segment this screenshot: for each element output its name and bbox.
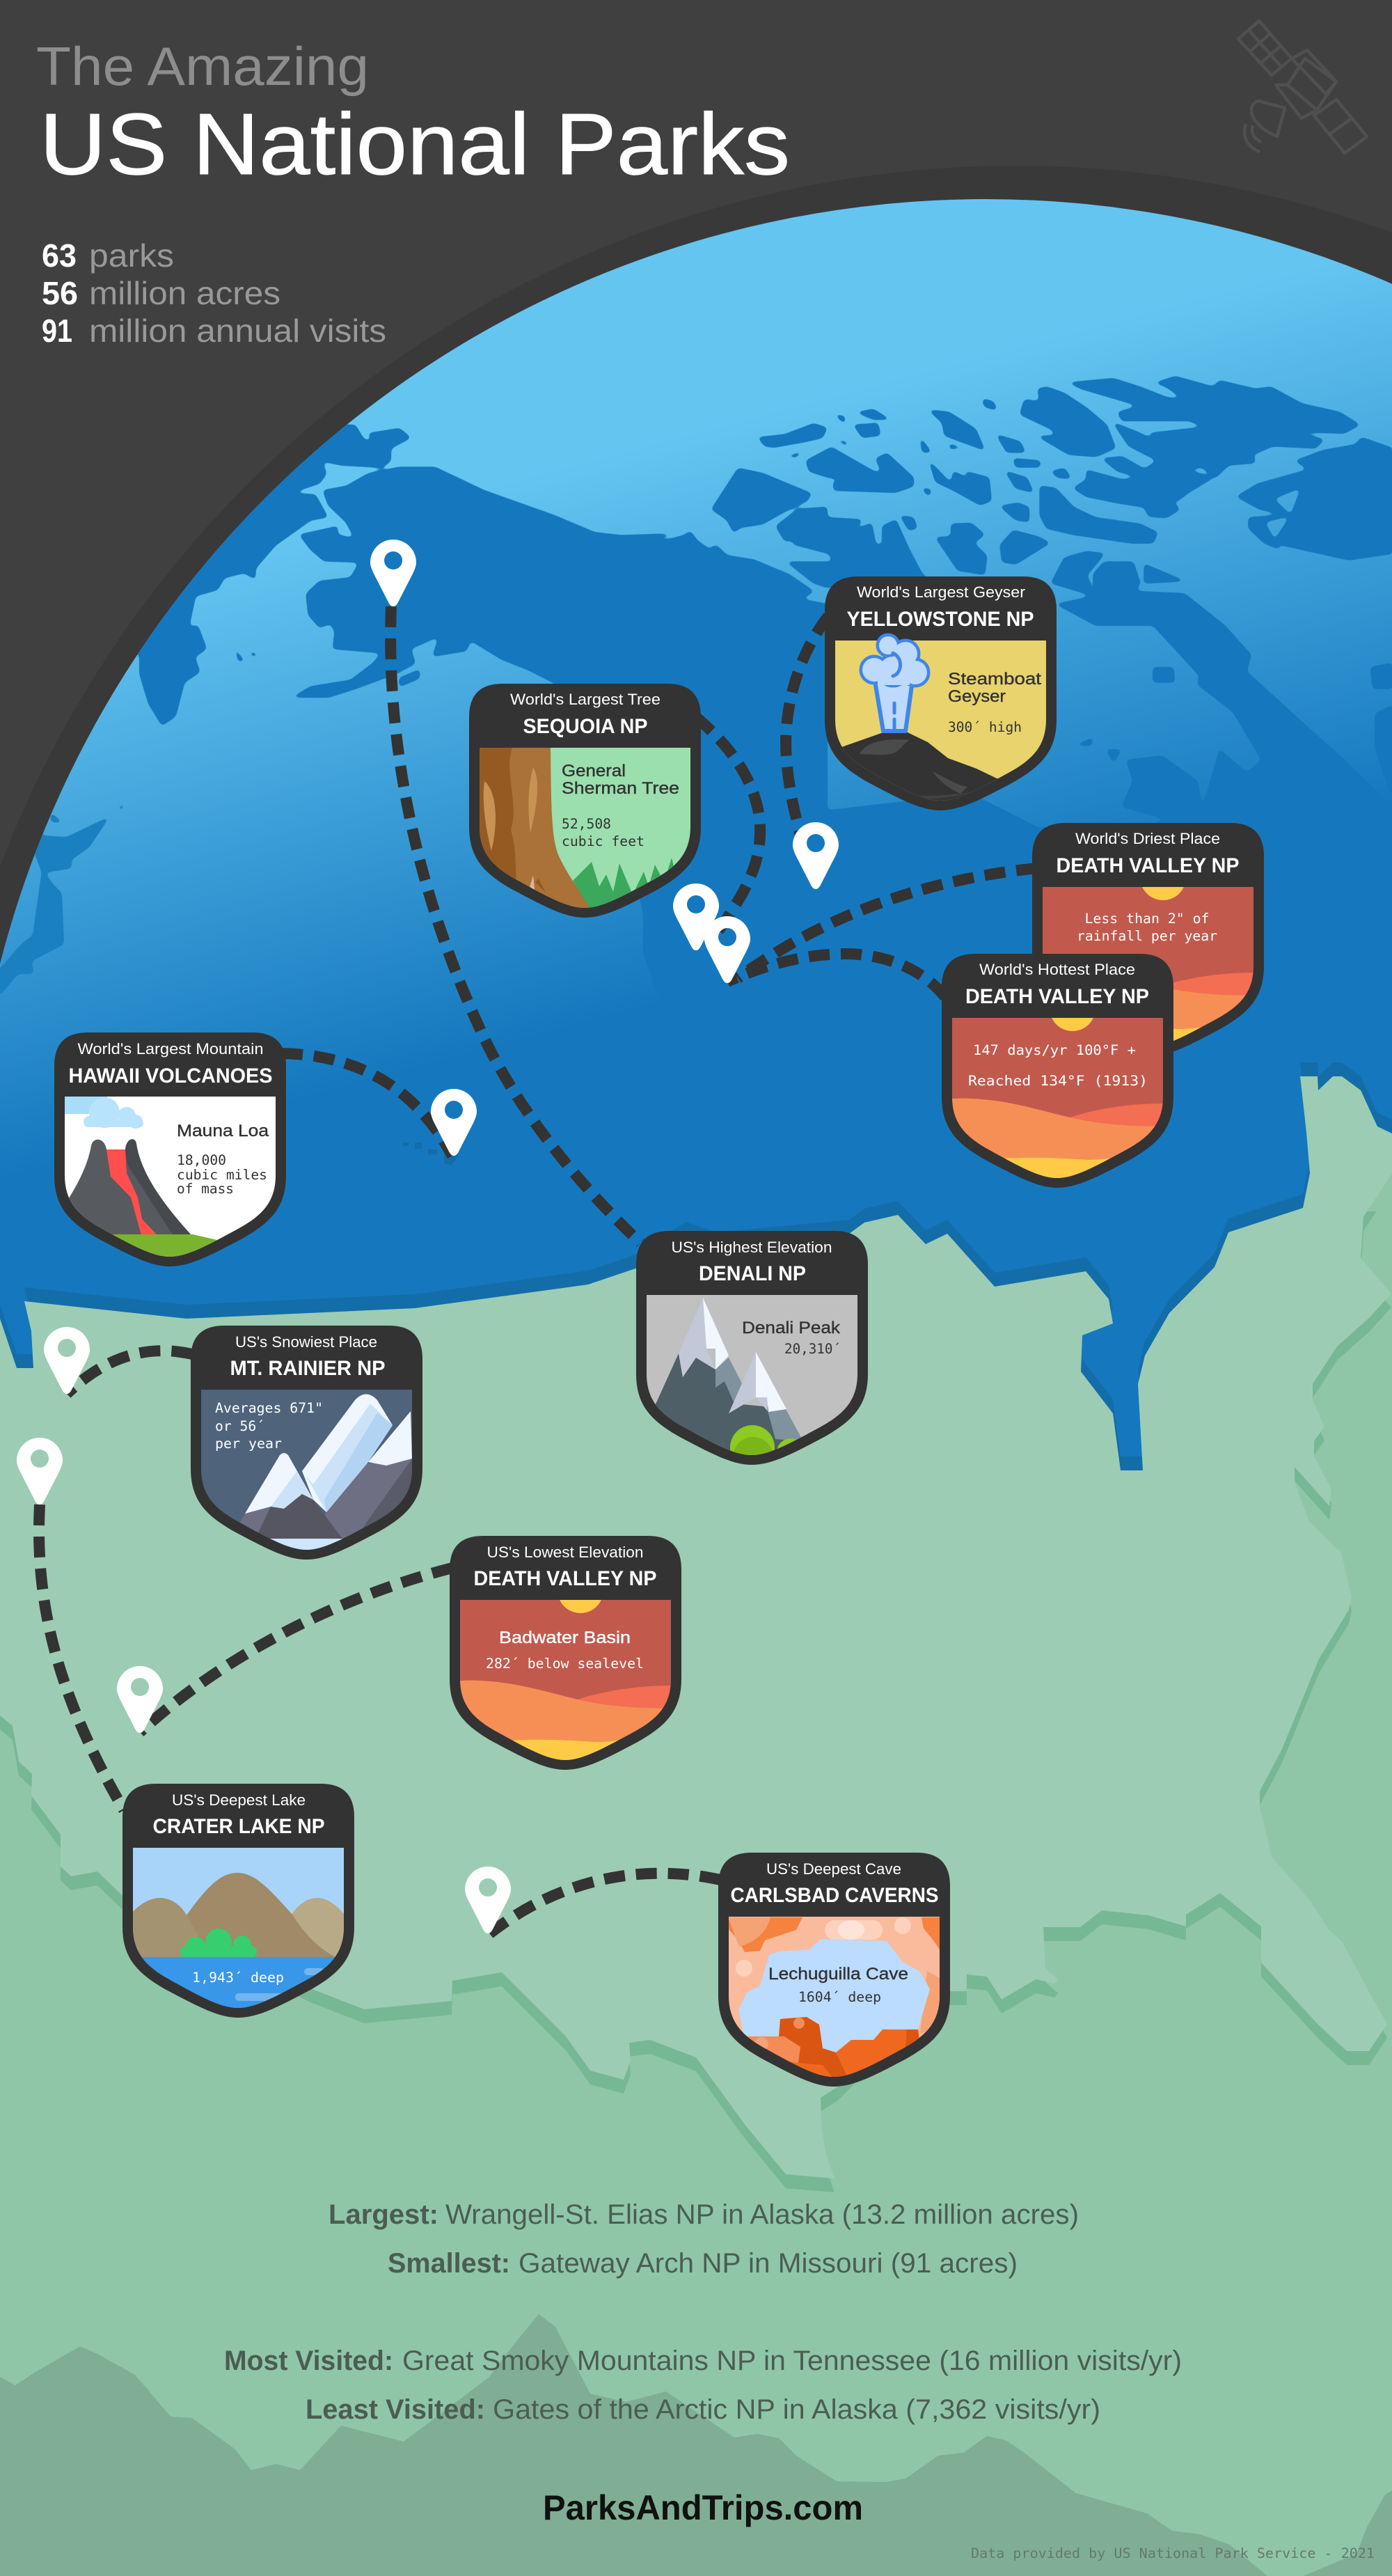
- badge: Crater Lake: US's Deepest Lake: [172, 1791, 306, 1809]
- badge: Sequoia: 52,508: [562, 816, 611, 832]
- fact: most visited park: Most Visited:: [224, 2346, 393, 2376]
- badge: Death Valley driest: [1032, 823, 1264, 1057]
- badge: Death Valley hottest: 147 days/yr 100°F +: [973, 1042, 1136, 1058]
- badge: Death Valley lowest: [450, 1536, 681, 1770]
- map pin: Death Valley north: [704, 916, 750, 983]
- badge: Death Valley hottest: [942, 954, 1173, 1188]
- icon: geyser: [862, 636, 927, 731]
- badge: Death Valley driest: rainfall per year: [1077, 928, 1217, 944]
- dashed route: Yellowstone: [786, 616, 828, 835]
- headline stats: parks: [89, 237, 174, 274]
- US northern coast shading: [0, 1062, 1392, 2165]
- badge: Sequoia: World's Largest Tree: [510, 691, 661, 708]
- badge: Mt Rainier: Averages 671": [215, 1400, 323, 1416]
- headline stats: million acres: [89, 275, 280, 311]
- dashed route: Hawaii: [282, 1053, 452, 1156]
- badge: Hawaii Volcanoes: of mass: [177, 1181, 234, 1197]
- badge: Mt Rainier: or 56´: [215, 1418, 264, 1434]
- badge: Death Valley driest: DEATH VALLEY NP: [1057, 854, 1239, 877]
- badge: Yellowstone: Steamboat: [948, 670, 1041, 689]
- headline stats: 56: [42, 275, 78, 311]
- dashed route: lowest elevation: [140, 1568, 452, 1732]
- badge: Hawaii Volcanoes: HAWAII VOLCANOES: [68, 1065, 273, 1087]
- badge: Yellowstone: Geyser: [948, 687, 1006, 706]
- badge: Denali: [636, 1231, 868, 1477]
- data source note: Data provided by US National Park Service - 2021: [971, 2545, 1375, 2561]
- map pin: Sequoia: [673, 883, 719, 950]
- map pin: Alaska: [370, 540, 416, 606]
- contiguous United States land: [0, 1076, 1392, 2178]
- dashed route: Sequoia: [696, 717, 760, 933]
- badge: Sequoia: General: [562, 762, 626, 780]
- icon: Hawaiian islands: [403, 1142, 459, 1165]
- fact: most visited park: Great Smoky Mountains NP in Tennessee (16 million visits/yr): [402, 2346, 1182, 2376]
- badge: Death Valley lowest: DEATH VALLEY NP: [473, 1567, 657, 1590]
- dashed route: driest place: [738, 868, 1037, 978]
- title: The Amazing: [36, 36, 369, 97]
- badge: Hawaii Volcanoes: cubic miles: [177, 1167, 267, 1183]
- badge: Denali: Denali Peak: [742, 1319, 841, 1337]
- US southern coast shadow: [0, 1211, 1391, 2192]
- badge: Carlsbad Caverns: 1604´ deep: [798, 1989, 881, 2005]
- badge: Yellowstone: YELLOWSTONE NP: [846, 608, 1034, 631]
- badge: Crater Lake: 1,943´ deep: [192, 1970, 284, 1986]
- fact: smallest park: Gateway Arch NP in Missouri (91 acres): [519, 2248, 1018, 2279]
- badge: Denali: DENALI NP: [699, 1262, 806, 1285]
- badge: Death Valley hottest: World's Hottest Place: [979, 961, 1135, 978]
- globe landmasses: [0, 376, 1392, 994]
- badge: Crater Lake: CRATER LAKE NP: [153, 1815, 324, 1838]
- badge: Carlsbad Caverns: US's Deepest Cave: [766, 1860, 901, 1878]
- dashed route: Rainier: [67, 1351, 192, 1394]
- badge: Carlsbad Caverns: [718, 1853, 950, 2087]
- icon: satellite: [1238, 21, 1367, 153]
- dashed route: hottest place: [727, 954, 945, 997]
- fact: largest park: Largest:: [329, 2199, 438, 2230]
- badge: Mt Rainier: [191, 1326, 422, 1560]
- website credit: ParksAndTrips.com: [543, 2488, 863, 2527]
- globe ocean: [0, 199, 1392, 2235]
- badge: Death Valley lowest: Badwater Basin: [499, 1628, 631, 1647]
- badge: Mt Rainier: MT. RAINIER NP: [230, 1357, 386, 1380]
- badge: Crater Lake: [122, 1784, 354, 2018]
- badge: Hawaii Volcanoes: Mauna Loa: [177, 1122, 269, 1140]
- map pin: Rainier: [44, 1327, 90, 1394]
- badge: Death Valley lowest: US's Lowest Elevation: [487, 1544, 643, 1561]
- headline stats: million annual visits: [89, 313, 386, 349]
- headline stats: [42, 237, 386, 349]
- surrounding green sea: [0, 1149, 1392, 2576]
- badge: Sequoia: [469, 684, 701, 918]
- badge: Mt Rainier: per year: [215, 1436, 282, 1452]
- badge: Sequoia: Sherman Tree: [562, 779, 679, 798]
- badge: Yellowstone: 300´ high: [948, 719, 1022, 735]
- badge: Carlsbad Caverns: Lechuguilla Cave: [768, 1965, 908, 1984]
- dashed route: Denali: [390, 606, 640, 1243]
- badge: Hawaii Volcanoes: [54, 1032, 286, 1266]
- dashed route: Crater Lake: [39, 1505, 124, 1810]
- badge: Mt Rainier: US's Snowiest Place: [235, 1333, 377, 1351]
- badge: Yellowstone: World's Largest Geyser: [857, 583, 1025, 601]
- badge: Hawaii Volcanoes: 18,000: [177, 1152, 226, 1168]
- badge: Death Valley lowest: 282´ below sealevel: [486, 1656, 644, 1672]
- fact: largest park: Wrangell-St. Elias NP in Alaska (13.2 million acres): [445, 2199, 1079, 2230]
- badge: Death Valley hottest: Reached 134°F (1913): [968, 1073, 1148, 1089]
- badge: Hawaii Volcanoes: World's Largest Mountain: [78, 1040, 263, 1058]
- badge: Yellowstone: [825, 576, 1057, 810]
- headline stats: 63: [42, 237, 77, 274]
- badge: Carlsbad Caverns: CARLSBAD CAVERNS: [731, 1884, 938, 1907]
- mountain silhouette: [0, 2314, 1392, 2576]
- map pin: Death Valley: [117, 1666, 163, 1733]
- fact: least visited park: Least Visited:: [306, 2394, 485, 2425]
- badge: Denali: US's Highest Elevation: [671, 1239, 832, 1256]
- badge: Death Valley driest: World's Driest Place: [1075, 830, 1220, 847]
- dashed route: Carlsbad: [487, 1874, 720, 1935]
- badge: Death Valley hottest: DEATH VALLEY NP: [965, 985, 1149, 1008]
- headline stats: 91: [42, 313, 72, 349]
- fact: least visited park: Gates of the Arctic NP in Alaska (7,362 visits/yr): [493, 2394, 1100, 2425]
- map pin: Carlsbad: [465, 1867, 511, 1933]
- map pin: Hawaii: [431, 1089, 477, 1156]
- badge: Denali: 20,310´: [784, 1341, 841, 1357]
- map pin: Yellowstone: [793, 822, 839, 889]
- map pin: Crater Lake: [17, 1438, 63, 1505]
- badge: Sequoia: cubic feet: [562, 833, 644, 849]
- badge: Sequoia: SEQUOIA NP: [523, 715, 647, 738]
- title: US National Parks: [40, 96, 790, 193]
- badge: Death Valley driest: Less than 2" of: [1084, 911, 1210, 927]
- fact: smallest park: Smallest:: [388, 2248, 510, 2279]
- title: [36, 36, 790, 193]
